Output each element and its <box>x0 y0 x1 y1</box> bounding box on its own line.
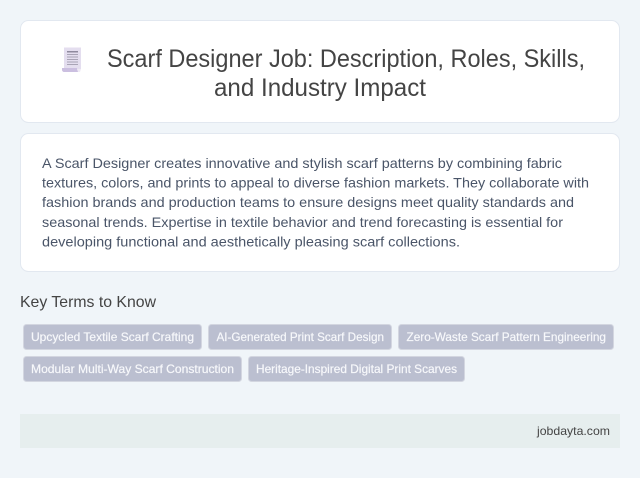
description text <box>42 155 589 249</box>
heading: key terms: Key Terms to Know <box>20 294 156 311</box>
tag: upcycled textile: Upcycled Textile Scarf Crafting <box>31 330 194 344</box>
tag: zero-waste: Zero-Waste Scarf Pattern Engineering <box>406 330 606 344</box>
footer bar: jobdayta.com <box>536 424 610 438</box>
title: Scarf Designer Job: Description, Roles, Skills, <box>107 45 585 73</box>
tag group: key terms <box>24 324 614 382</box>
tag: modular multi-way: Modular Multi-Way Scarf Construction <box>31 362 234 376</box>
tag: AI-generated print <box>208 324 392 350</box>
icon: paper scroll document <box>62 48 81 72</box>
panel: title card <box>20 20 620 122</box>
description text: fashion brands and production teams to ensure designs meet quality standards and <box>42 194 574 210</box>
tag: AI-generated print: AI-Generated Print Scarf Design <box>216 330 384 344</box>
description text: developing functional and aesthetically pleasing scarf collections. <box>42 233 460 249</box>
description text: seasonal trends. Expertise in textile behavior and trend forecasting is essential for <box>42 214 563 230</box>
tag: zero-waste <box>398 324 614 350</box>
panel: description card <box>20 134 620 272</box>
tag: modular multi-way <box>24 356 242 382</box>
description text: A Scarf Designer creates innovative and stylish scarf patterns by combining fabric <box>42 155 562 171</box>
tag: heritage-inspired <box>248 356 464 382</box>
footer bar <box>20 414 620 448</box>
tag: upcycled textile <box>24 324 202 350</box>
title: and Industry Impact <box>214 74 426 102</box>
title <box>107 45 585 102</box>
tag: heritage-inspired: Heritage-Inspired Digital Print Scarves <box>256 362 457 376</box>
description text: textures, colors, and prints to appeal to diverse fashion markets. They collaborate with <box>42 175 589 191</box>
